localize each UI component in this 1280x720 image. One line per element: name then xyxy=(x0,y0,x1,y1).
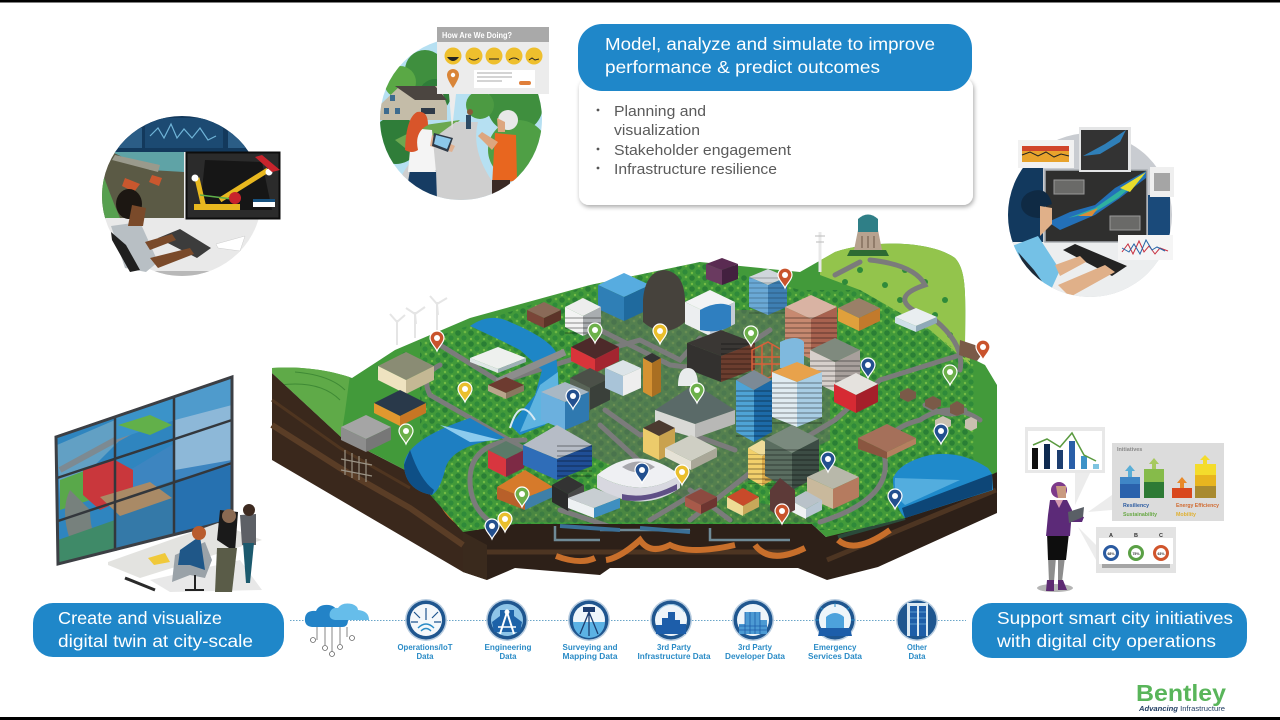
data labels: Surveying and xyxy=(562,642,618,652)
building: white offices xyxy=(565,298,601,336)
building: white river xyxy=(470,347,526,373)
bar chart panel xyxy=(1025,427,1105,473)
building: grey front xyxy=(665,435,717,470)
building: dark brown tower xyxy=(687,330,755,382)
stadium xyxy=(597,458,680,502)
tower: orange narrow xyxy=(643,353,661,397)
tower: blue stepped xyxy=(598,273,650,321)
data source strip xyxy=(290,599,966,661)
data labels: Mapping Data xyxy=(562,651,618,661)
left pill: create and visualize xyxy=(33,603,284,657)
building: white low xyxy=(895,308,937,332)
building: brick tower xyxy=(770,478,795,518)
data labels: Data xyxy=(908,651,926,661)
right pill: support smart city initiatives xyxy=(972,603,1247,658)
map pins xyxy=(399,268,990,539)
scaffold xyxy=(752,342,782,378)
heading text xyxy=(605,34,935,77)
initiatives panel: Sustainability xyxy=(1123,512,1158,518)
woman figure xyxy=(1037,482,1084,592)
data labels: 3rd Party xyxy=(738,642,772,652)
tower: yellow tall xyxy=(748,440,776,486)
lower river xyxy=(404,418,505,495)
operators xyxy=(172,504,256,592)
building: white with blue cylinder xyxy=(685,290,735,336)
upper river xyxy=(470,318,560,435)
KPI table panel xyxy=(1096,527,1176,573)
pond xyxy=(893,454,993,518)
callout: model, analyze and simulate card xyxy=(578,24,973,205)
initiatives panel: Energy Efficiency xyxy=(1176,503,1220,509)
building: curved white xyxy=(568,488,620,518)
building: houses right xyxy=(900,340,983,416)
icon: engineering data xyxy=(486,599,528,641)
data labels: Other xyxy=(907,642,928,652)
water tower xyxy=(847,214,889,256)
building: white blue front xyxy=(790,491,822,519)
icon: other data xyxy=(896,599,938,641)
building: orange flat xyxy=(497,470,553,510)
tower: salmon xyxy=(785,295,837,359)
building: brown xyxy=(527,302,561,328)
icon: surveying data xyxy=(568,599,610,641)
city block green land xyxy=(260,235,1010,545)
left pill: create and visualize: digital twin at city-scale xyxy=(58,631,253,651)
building: pale blue xyxy=(605,360,641,396)
feedback panel: How Are We Doing? xyxy=(442,30,512,40)
data labels: Engineering xyxy=(484,642,532,652)
heading pill xyxy=(578,24,972,91)
icon: 3rd party infrastructure data xyxy=(650,599,692,641)
icon: data cloud xyxy=(305,604,369,656)
wind turbines xyxy=(390,296,447,345)
illustration: analyst with flood map screens xyxy=(1005,127,1175,302)
logo: Bentley Advancing Infrastructure: Advancing Infrastructure xyxy=(1138,704,1225,713)
bullet list: Planning and xyxy=(614,103,706,120)
tower: blue xyxy=(749,269,787,315)
building: front red brown xyxy=(685,489,717,514)
icon: operations/IoT data xyxy=(405,599,447,641)
KPI table panel: 75% xyxy=(1132,552,1140,556)
silo: dark xyxy=(643,270,685,331)
feedback panel xyxy=(437,27,549,130)
building: yellow red roof xyxy=(727,488,759,516)
city block soil cross-section xyxy=(272,373,997,580)
initiatives panel: Initiatives xyxy=(1117,447,1142,453)
initiatives panel: Resiliency xyxy=(1123,503,1150,509)
tower: blue front xyxy=(736,370,772,442)
data labels: 3rd Party xyxy=(657,642,691,652)
KPI table panel: B xyxy=(1134,533,1138,539)
data labels: Developer Data xyxy=(725,651,785,661)
icon: emergency services data xyxy=(814,599,856,641)
building: blue large xyxy=(523,425,592,480)
roads xyxy=(427,260,980,530)
building: dark small xyxy=(552,476,584,511)
right pill: support smart city initiatives: with digital city operations xyxy=(996,631,1216,651)
tower: blue main left xyxy=(541,382,589,430)
illustration: operator at control room monitors xyxy=(100,112,280,282)
KPI table panel: 63% xyxy=(1157,552,1165,556)
cell tower xyxy=(815,232,825,272)
data labels: Services Data xyxy=(808,651,862,661)
building: red small xyxy=(488,441,524,477)
tower: maroon xyxy=(706,258,738,285)
building: brown right xyxy=(858,424,916,459)
KPI table panel: 68% xyxy=(1107,552,1115,556)
bullet list xyxy=(597,103,792,178)
building: cream cluster xyxy=(378,352,434,394)
KPI table panel: C xyxy=(1159,533,1163,539)
bullet list: Infrastructure resilience xyxy=(614,161,777,178)
icon: 3rd party developer data xyxy=(732,599,774,641)
illustration: citizen feedback circle xyxy=(372,27,549,205)
building: tan xyxy=(807,465,859,509)
illustration: video wall control room xyxy=(50,370,262,592)
tower: dark green xyxy=(765,425,819,490)
bullet list: Stakeholder engagement xyxy=(614,142,792,159)
museum xyxy=(655,384,735,438)
heading text: performance & predict outcomes xyxy=(605,57,880,77)
data labels: Emergency xyxy=(814,642,857,652)
concrete frame xyxy=(341,415,391,452)
data labels: Operations/IoT xyxy=(398,642,453,652)
tower: white-blue high rise xyxy=(772,338,822,427)
building: grey striped xyxy=(810,338,860,392)
left pill: create and visualize: Create and visualize xyxy=(58,608,222,628)
popup charts xyxy=(1018,127,1174,260)
initiatives panel xyxy=(1112,443,1224,521)
data labels xyxy=(398,642,928,661)
warehouse: orange xyxy=(374,390,426,426)
heading text: Model, analyze and simulate to improve xyxy=(605,34,935,54)
video wall xyxy=(50,370,240,570)
building: orange xyxy=(838,298,880,331)
building: red right xyxy=(834,373,878,413)
capitol dome xyxy=(678,368,698,386)
logo: Bentley Advancing Infrastructure: Bentley xyxy=(1136,680,1226,706)
illustration: woman with smart city dashboards xyxy=(1025,427,1224,592)
data labels: Infrastructure Data xyxy=(638,651,711,661)
initiatives panel: Mobility xyxy=(1176,512,1197,518)
building: dark grey xyxy=(570,368,610,410)
right pill: support smart city initiatives: Support smart city initiatives xyxy=(997,608,1233,628)
building: small brown xyxy=(488,377,524,399)
data labels: Data xyxy=(500,651,517,661)
bullet list: visualization xyxy=(614,122,700,139)
building: yellow with dark roof xyxy=(643,420,675,460)
data labels: Data xyxy=(416,651,434,661)
city buildings xyxy=(341,258,983,519)
KPI table panel: A xyxy=(1109,533,1113,539)
building: red xyxy=(571,335,619,373)
console table xyxy=(108,523,262,578)
